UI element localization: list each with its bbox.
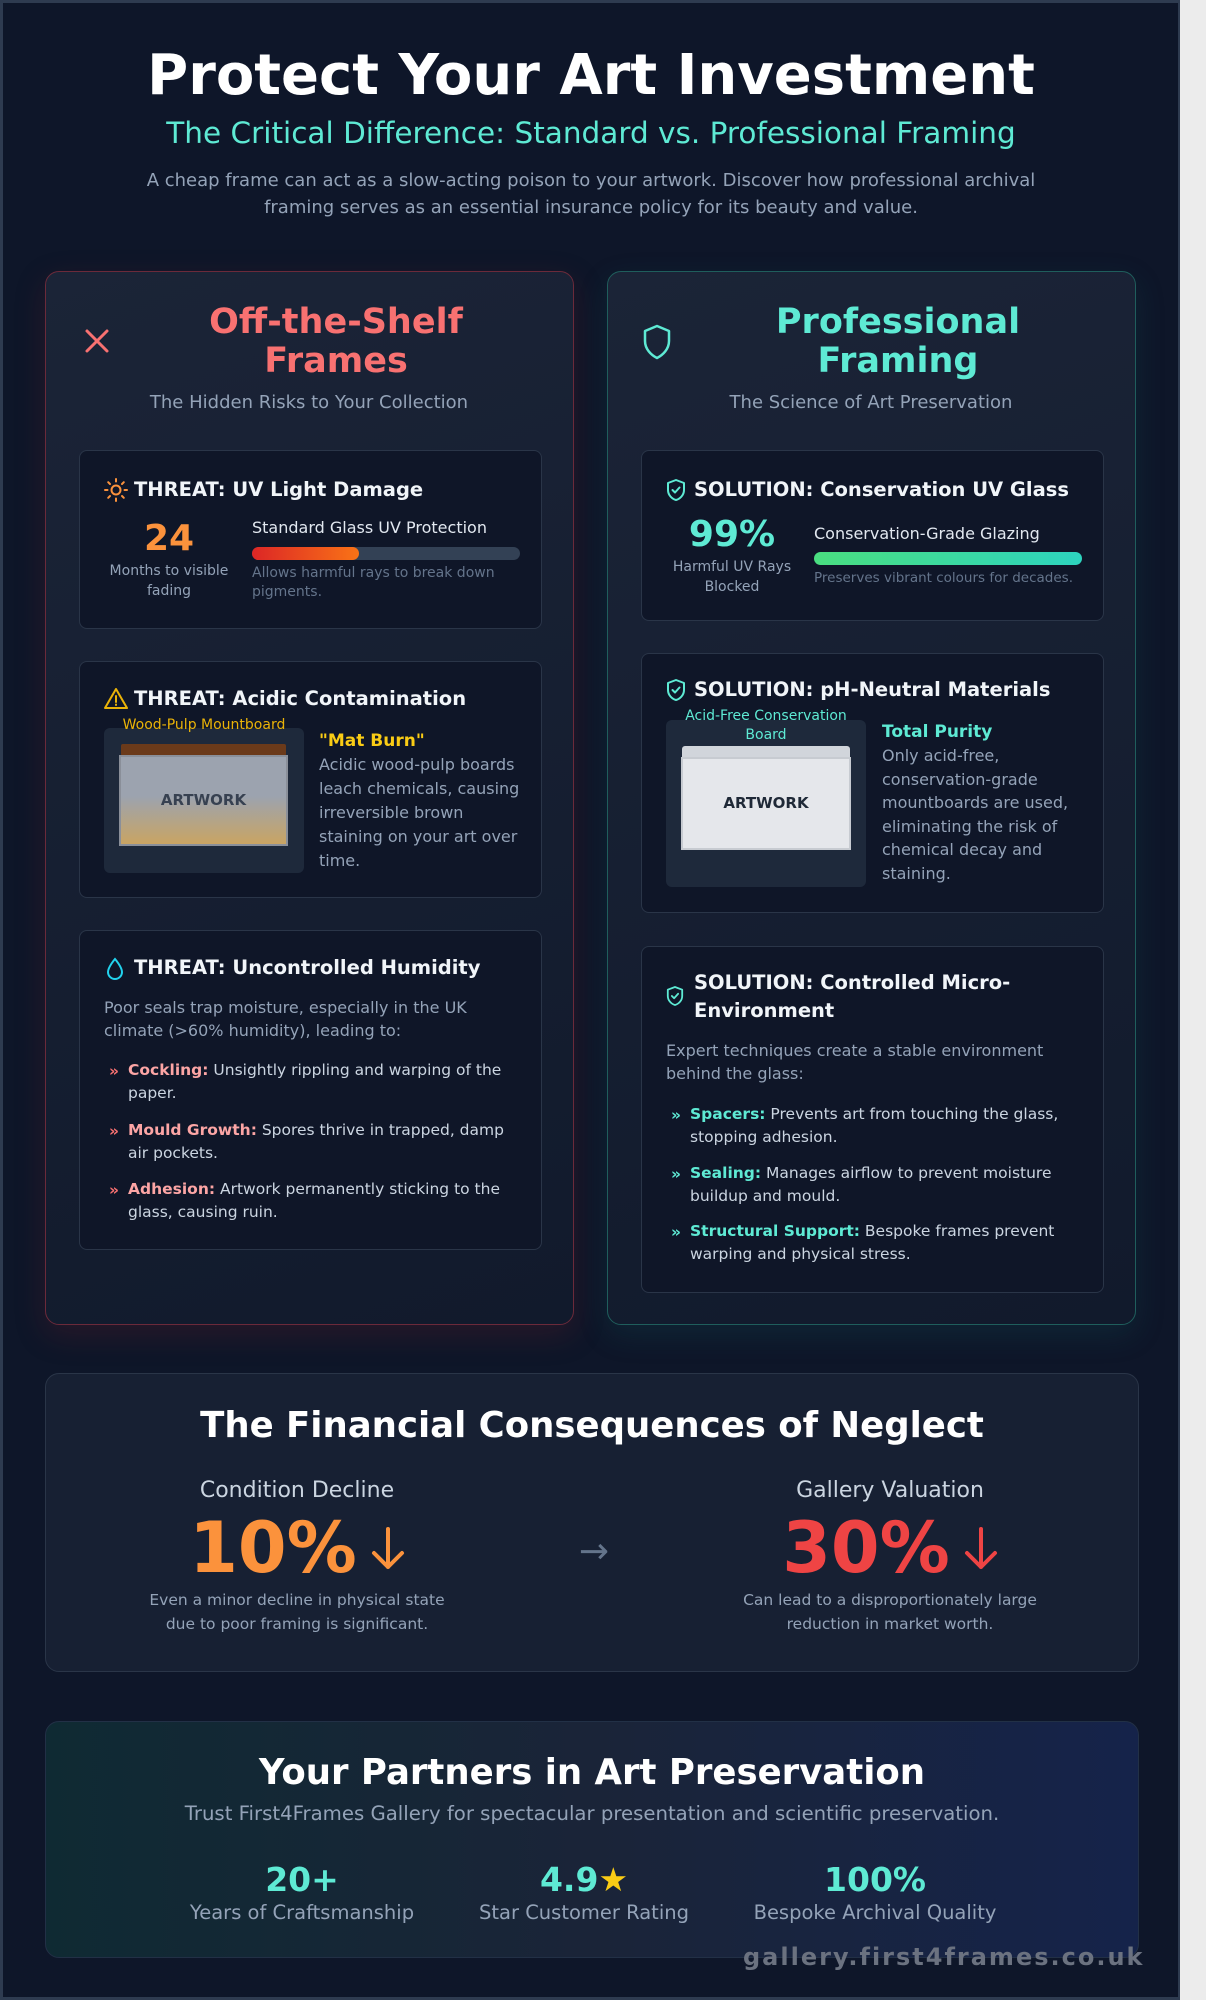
list item: sealing: » <box>671 1165 681 1183</box>
title: Protect Your Art Investment <box>147 43 1035 108</box>
subtitle: The Critical Difference: Standard vs. Professional Framing <box>166 116 1016 150</box>
bar: standard glass UV protection <box>252 518 520 600</box>
label: acid-free conservation board <box>685 708 847 743</box>
list item: mould: » <box>109 1122 119 1140</box>
card: conservation UV glass <box>641 450 1104 621</box>
text: mat burn: Acidic wood-pulp boards leach chemicals, causing irreversible brown staining on your art over time. <box>319 755 519 870</box>
label: acid-free conservation board: Acid-Free Conservation <box>685 708 847 724</box>
stat: 24 months: 24 <box>144 518 194 559</box>
stat: 24 months <box>110 518 228 599</box>
text: total purity: Only acid-free, conservation-grade mountboards are used, eliminating the risk of chemical decay and staining. <box>882 746 1068 882</box>
list item: cockling: » <box>109 1062 119 1080</box>
list item: mould: Mould Growth: Spores thrive in trapped, damp air pockets. <box>128 1121 504 1162</box>
list item: cockling: Cockling: Unsightly rippling and warping of the paper. <box>128 1061 501 1102</box>
panel heading: Framing <box>818 341 978 381</box>
stat: rating: 4.9★ <box>540 1860 628 1899</box>
stat: rating <box>479 1860 689 1924</box>
panel: financial consequences <box>45 1373 1139 1672</box>
intro text: A cheap frame can act as a slow-acting poison to your artwork. Discover how professional archival framing serves as an essential insurance policy for its beauty and value. <box>147 170 1035 218</box>
card: pH-neutral materials <box>641 653 1104 913</box>
panel subheading: The Science of Art Preservation <box>730 392 1012 413</box>
text: mat burn: "Mat Burn" <box>319 731 425 751</box>
illustration: acid-free board: ARTWORK <box>723 794 809 812</box>
list item: structural support: » <box>671 1223 681 1241</box>
text: intro: Poor seals trap moisture, especially in the UK climate (>60% humidity), leading to: <box>104 998 467 1040</box>
footer: website: gallery.first4frames.co.uk <box>743 1943 1144 1971</box>
stat: condition decline: Even a minor decline in physical state due to poor framing is significant. <box>149 1591 445 1633</box>
list item: sealing: Sealing: Manages airflow to prevent moisture buildup and mould. <box>690 1164 1051 1205</box>
stat: years <box>190 1860 414 1924</box>
icon: shield <box>644 324 670 360</box>
card heading: SOLUTION: Controlled Micro- <box>694 971 1010 994</box>
label: acid-free conservation board: Board <box>745 727 787 743</box>
panel subheading: The Hidden Risks to Your Collection <box>150 392 468 413</box>
panel: professional framing <box>607 271 1136 1325</box>
card heading: Environment <box>694 999 834 1022</box>
heading: The Financial Consequences of Neglect <box>200 1405 984 1446</box>
stat: gallery valuation <box>743 1478 1037 1633</box>
list item: adhesion: » <box>109 1181 119 1199</box>
list item: structural support: Structural Support: Bespoke frames prevent warping and physical stress. <box>690 1222 1054 1263</box>
stat: 24 months: Months to visible <box>110 563 228 579</box>
heading: Your Partners in Art Preservation <box>259 1752 925 1793</box>
card heading: THREAT: Acidic Contamination <box>134 687 466 710</box>
bar: standard glass UV protection: Standard Glass UV Protection <box>252 518 487 537</box>
bar: conservation-grade glazing: Preserves vibrant colours for decades. <box>814 570 1073 586</box>
stat: years: 20+ <box>265 1860 339 1899</box>
stat: condition decline: Condition Decline <box>200 1478 394 1503</box>
stat: rating: Star Customer Rating <box>479 1901 689 1924</box>
panel heading <box>209 302 464 381</box>
icon: warning triangle <box>104 688 128 709</box>
panel heading: Off-the-Shelf <box>209 302 463 342</box>
bar: standard glass UV protection: Allows harmful rays to break down pigments. <box>252 565 495 600</box>
panel heading: Professional <box>776 302 1020 342</box>
icon: sun <box>104 478 128 502</box>
panel heading <box>776 302 1020 381</box>
icon: shield check <box>667 679 685 701</box>
stat: condition decline: 10% <box>189 1507 357 1589</box>
card heading: SOLUTION: pH-Neutral Materials <box>694 678 1050 701</box>
subheading: Trust First4Frames Gallery for spectacular presentation and scientific preservation. <box>185 1802 999 1825</box>
stat: 99%: Harmful UV Rays <box>673 559 791 575</box>
illustration: wood-pulp mountboard <box>104 728 304 873</box>
stat: quality <box>754 1860 996 1924</box>
card: humidity threat <box>79 930 542 1250</box>
card heading: THREAT: UV Light Damage <box>134 478 423 501</box>
bar: conservation-grade glazing: Conservation-Grade Glazing <box>814 524 1040 543</box>
stat: quality: Bespoke Archival Quality <box>754 1901 996 1924</box>
illustration: acid-free board <box>666 720 866 887</box>
stat: gallery valuation: 30% <box>782 1507 950 1589</box>
card heading <box>694 971 1010 1022</box>
panel heading: Frames <box>264 341 408 381</box>
card: acidic contamination threat <box>79 661 542 898</box>
panel: partners <box>45 1721 1139 1958</box>
icon: red X <box>85 329 109 353</box>
list item: spacers: » <box>671 1106 681 1124</box>
illustration: wood-pulp mountboard: ARTWORK <box>161 791 246 809</box>
bar: conservation-grade glazing <box>814 524 1082 586</box>
card: controlled micro-environment <box>641 946 1104 1293</box>
stat: quality: 100% <box>824 1860 926 1899</box>
label: wood-pulp mountboard: Wood-Pulp Mountboard <box>123 717 285 733</box>
icon: shield check <box>667 479 685 501</box>
stat: condition decline <box>149 1478 445 1633</box>
text: intro: Expert techniques create a stable environment behind the glass: <box>666 1041 1043 1083</box>
stat: 99%: 99% <box>689 514 775 555</box>
card heading: SOLUTION: Conservation UV Glass <box>694 478 1069 501</box>
icon: water drop <box>107 958 123 980</box>
panel: off-the-shelf frames <box>45 271 574 1325</box>
icon: shield check <box>666 986 684 1006</box>
card: UV light damage threat <box>79 450 542 629</box>
stat: gallery valuation: Gallery Valuation <box>796 1478 984 1503</box>
stat: years: Years of Craftsmanship <box>190 1901 414 1924</box>
card heading: THREAT: Uncontrolled Humidity <box>134 956 480 979</box>
list item: spacers: Spacers: Prevents art from touching the glass, stopping adhesion. <box>690 1105 1058 1146</box>
stat: 99%: Blocked <box>705 579 759 595</box>
list item: adhesion: Adhesion: Artwork permanently sticking to the glass, causing ruin. <box>128 1180 500 1221</box>
stat: gallery valuation: Can lead to a disproportionately large reduction in market worth. <box>743 1591 1037 1633</box>
stat: 24 months: fading <box>147 583 191 599</box>
arrow: leads to: → <box>579 1531 609 1572</box>
stat: 99% <box>673 514 791 595</box>
text: total purity: Total Purity <box>882 722 992 742</box>
